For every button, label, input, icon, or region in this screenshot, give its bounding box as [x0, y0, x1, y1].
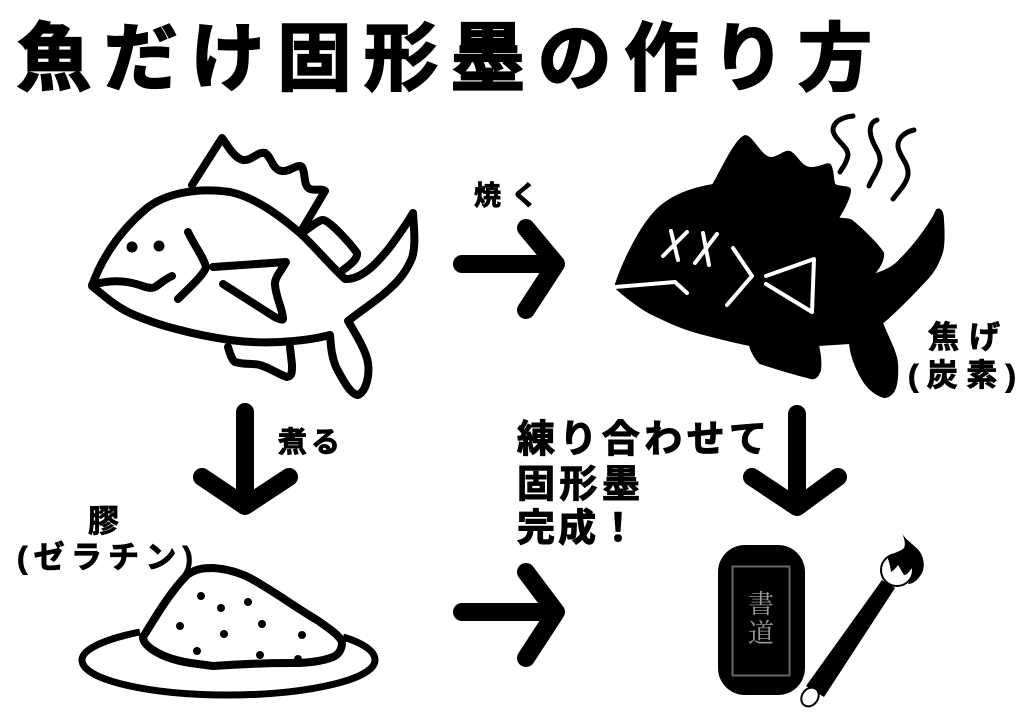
icon: plate of gelatin	[82, 568, 375, 695]
arrow: raw fish to burnt fish	[462, 228, 556, 310]
arrow: burnt fish to ink	[752, 414, 838, 507]
icon: gelatin dots	[176, 592, 306, 663]
label: solid ink: 固形墨	[517, 464, 640, 506]
label: calligraphy: 書	[748, 590, 774, 619]
label: calligraphy: 道	[748, 619, 774, 648]
icon: burnt fish face lines	[615, 231, 814, 312]
label: glue: 膠	[88, 504, 119, 539]
label: knead together: 練り合わせて	[517, 419, 767, 461]
arrow: fish to gelatin	[202, 412, 289, 506]
icon: brush	[798, 533, 924, 710]
label: burnt: 焦げ	[928, 320, 1000, 355]
icon: ink stick	[718, 545, 805, 695]
label: carbon: (炭素)	[908, 358, 1016, 393]
label: gelatin: (ゼラチン)	[17, 540, 193, 575]
label: boil: 煮る	[278, 426, 340, 459]
icon: fish eyes	[126, 240, 164, 252]
icon: burnt fish	[615, 136, 944, 397]
icon: smoke	[833, 116, 914, 199]
arrow: gelatin to ink	[462, 572, 556, 658]
icon: raw fish	[92, 138, 414, 395]
label: complete: 完成！	[517, 508, 637, 550]
label: grill: 焼く	[474, 181, 538, 211]
title: 魚だけ固形墨の作り方	[17, 17, 872, 100]
